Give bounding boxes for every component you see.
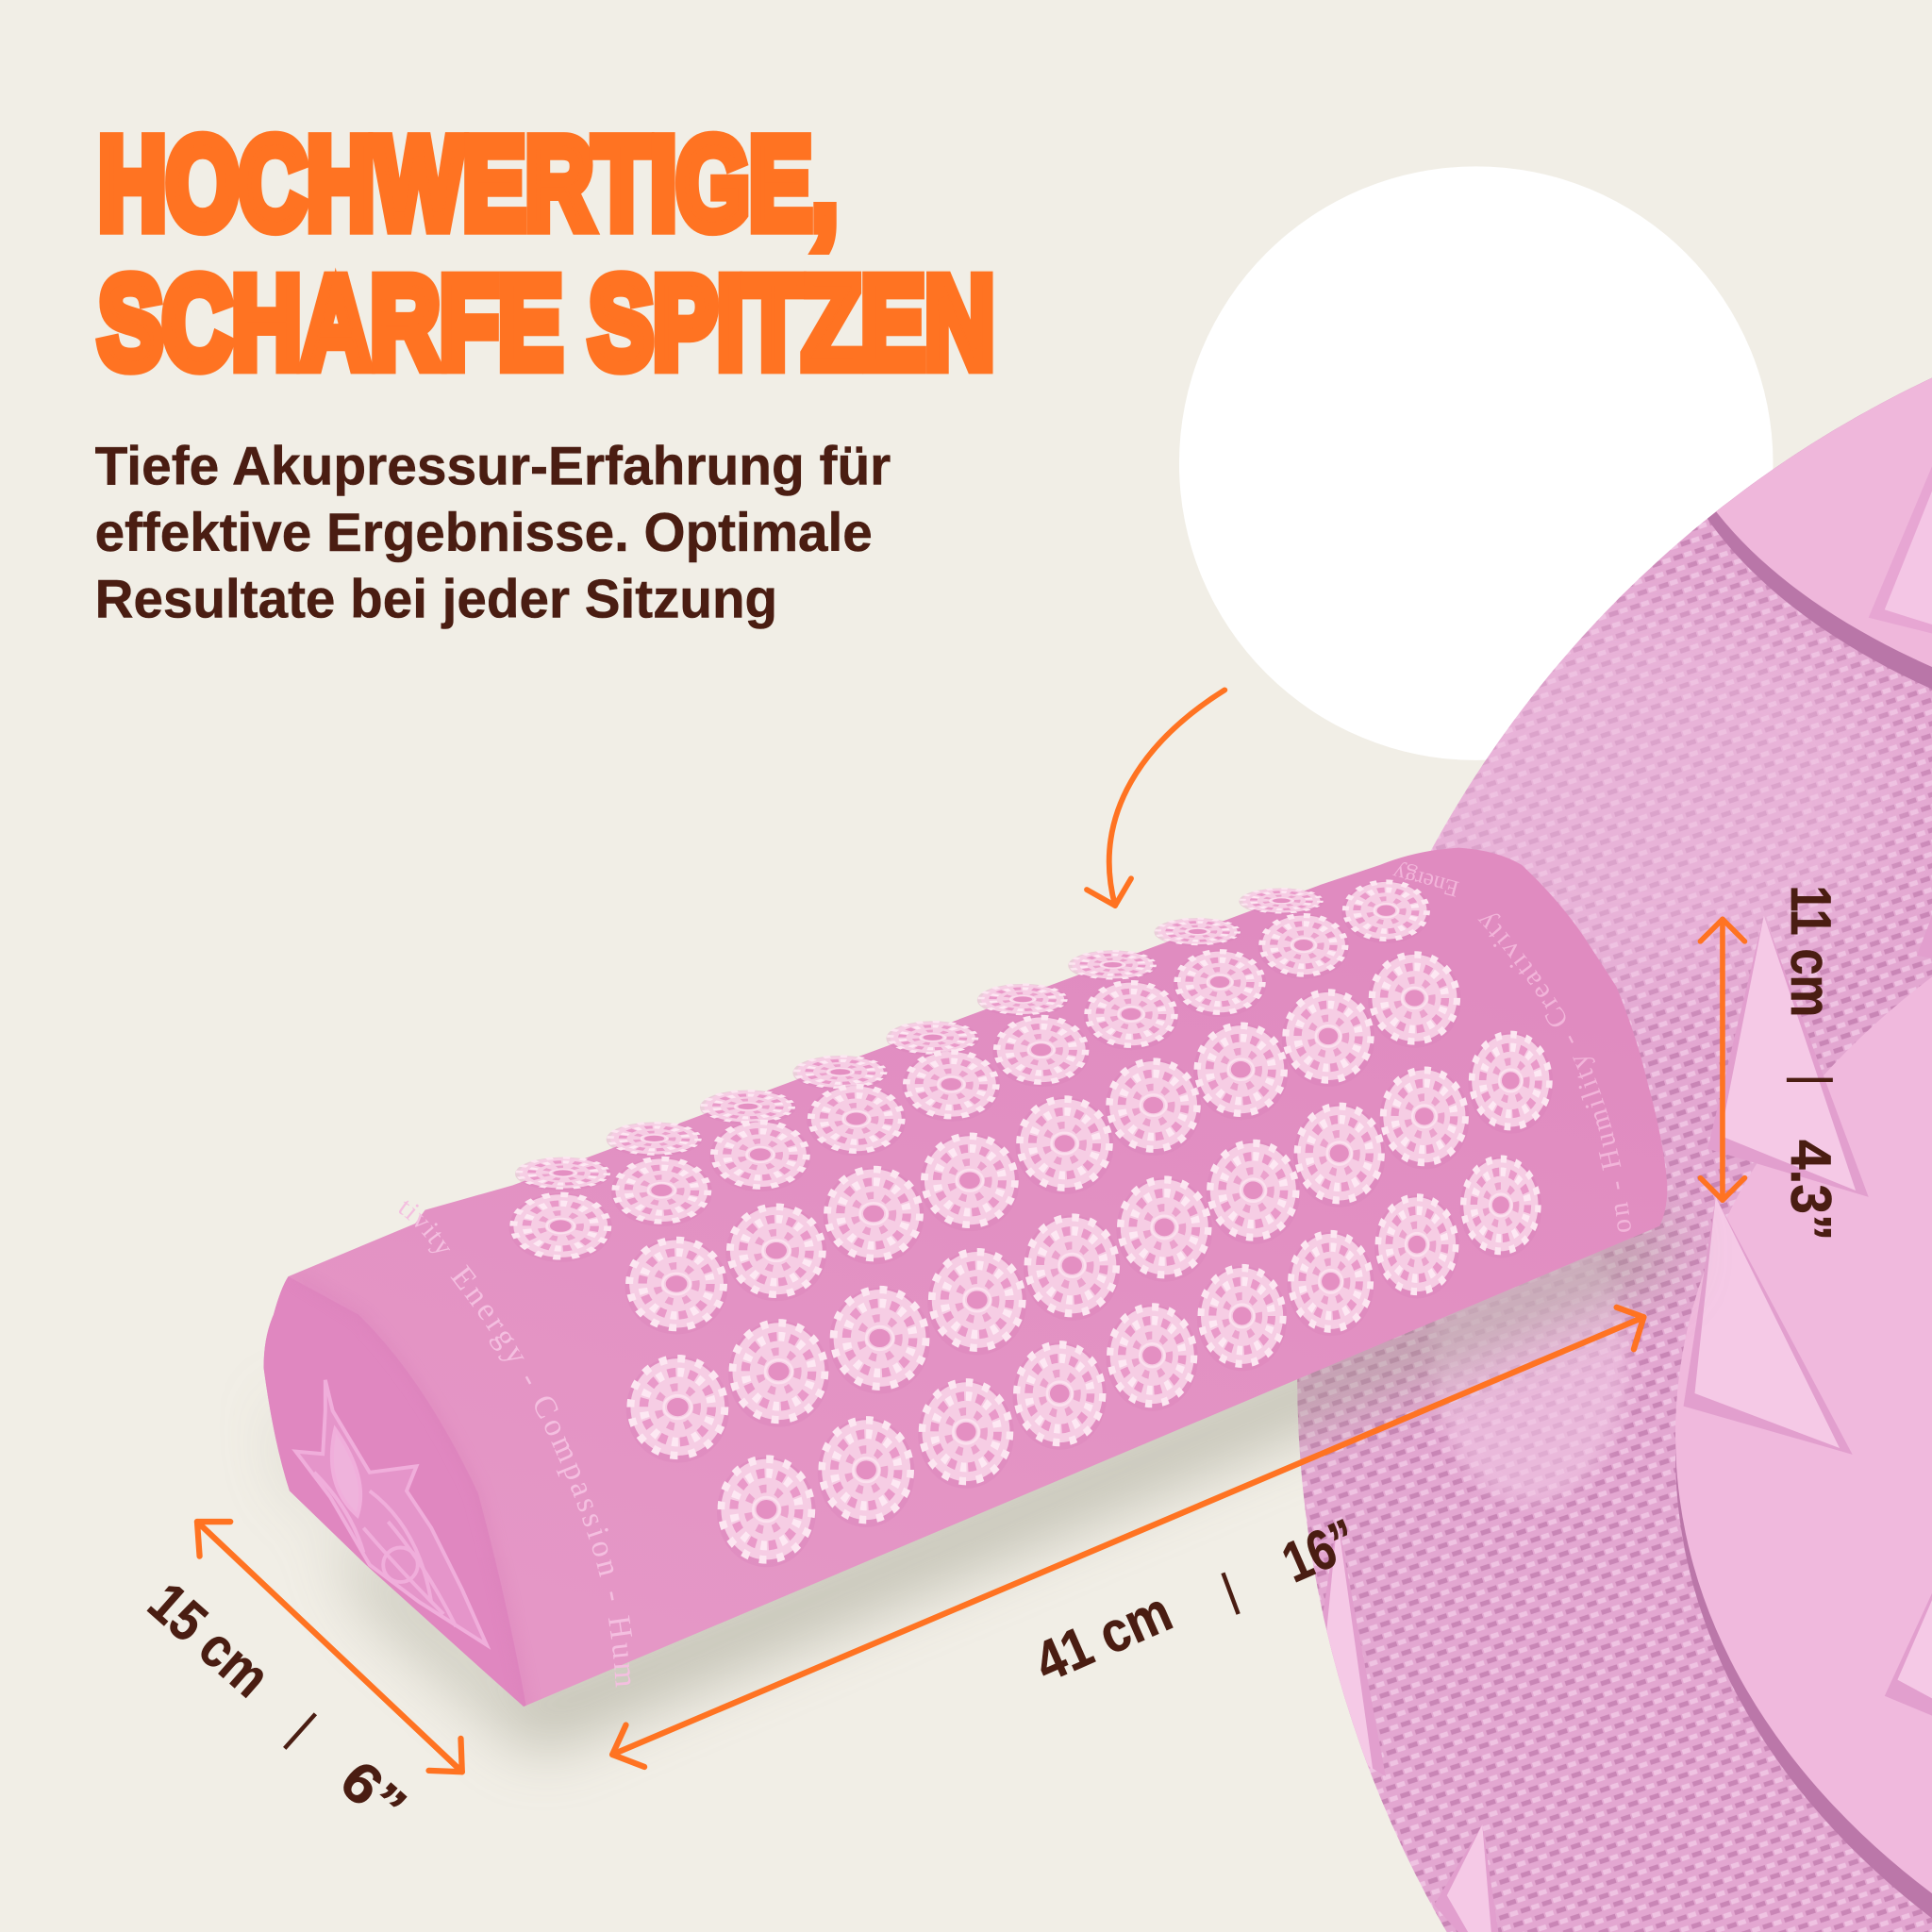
acupressure pillow bbox=[264, 847, 1668, 1707]
description text: Resultate bei jeder Sitzung bbox=[95, 569, 777, 629]
width label: 15 cm bbox=[137, 1571, 282, 1709]
spike discs: fourth row bbox=[626, 1033, 1553, 1463]
pillow end face bbox=[264, 1276, 526, 1707]
pillow shadow bbox=[277, 1214, 1670, 1750]
printed words on fabric: tivity bbox=[399, 1200, 450, 1253]
spike discs: third row bbox=[625, 953, 1461, 1334]
spike discs: fifth row bbox=[717, 1157, 1541, 1567]
description text: effektive Ergebnisse. Optimale bbox=[95, 503, 873, 563]
title bbox=[98, 112, 994, 395]
height label bbox=[1779, 885, 1842, 1241]
mandala ornament bbox=[295, 1380, 487, 1645]
length label: 16” bbox=[1274, 1507, 1366, 1594]
spike discs: ridge row bbox=[515, 889, 1324, 1191]
description text: Tiefe Akupressur-Erfahrung für bbox=[95, 436, 891, 496]
width label: 6” bbox=[328, 1748, 418, 1839]
length dimension arrow bbox=[612, 1307, 1643, 1767]
description text bbox=[95, 436, 891, 629]
length label bbox=[1025, 1507, 1366, 1694]
printed words on fabric bbox=[399, 862, 1631, 1688]
printed words on fabric: on - Humility - Creativity bbox=[1477, 913, 1631, 1232]
inset photo: close-up of spikes bbox=[1160, 0, 1932, 1932]
width label bbox=[137, 1571, 418, 1839]
spike discs: second row bbox=[509, 881, 1431, 1262]
height dimension arrow bbox=[1700, 919, 1744, 1200]
printed words on fabric: Energy bbox=[1392, 862, 1459, 897]
curved arrow from inset to pillow bbox=[1087, 690, 1224, 906]
pillow body bbox=[264, 848, 1667, 1707]
title: SCHARFE SPITZEN bbox=[98, 251, 994, 395]
length label: 41 cm bbox=[1025, 1579, 1181, 1694]
height label: 4.3” bbox=[1779, 1140, 1842, 1241]
width dimension arrow bbox=[197, 1522, 462, 1772]
title: HOCHWERTIGE, bbox=[98, 112, 838, 257]
height label: 11 cm bbox=[1779, 885, 1842, 1017]
